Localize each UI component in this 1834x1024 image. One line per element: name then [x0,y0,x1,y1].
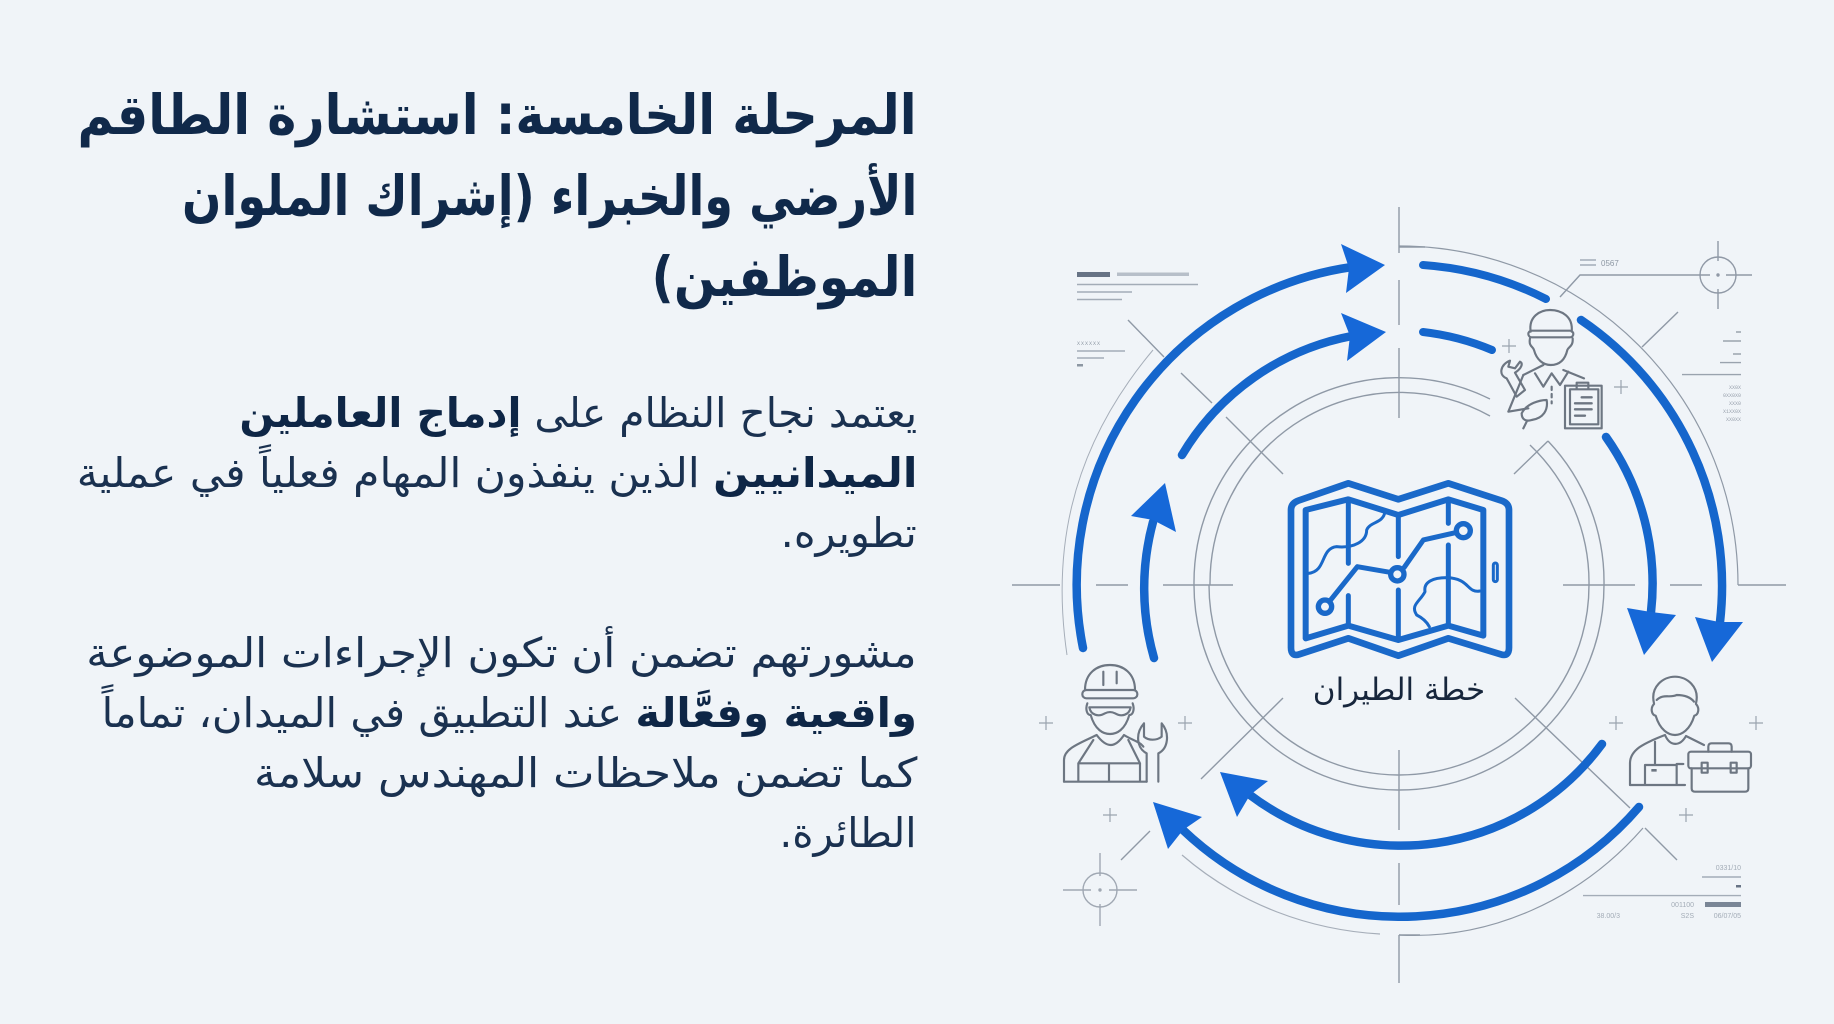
crosshair: top right [1700,241,1736,309]
blueprint notes: bottom right: 06/07/05 [1714,913,1741,920]
paragraph: field workers integration: الميدانيين الذين ينفذون المهام فعلياً في عملية [76,449,917,497]
arrow: top right outer dash [1423,265,1546,299]
label: flight plan: خطة الطيران [1313,672,1485,708]
blueprint notes: right side [1682,332,1741,423]
arrow: inner bottom [1220,744,1602,846]
arrow: short inner left upward [1131,483,1176,658]
blueprint background lines [1012,207,1786,983]
title: المرحلة الخامسة: استشارة الطاقم [78,83,917,147]
blueprint notes: bottom right: 001100 [1671,902,1694,909]
arrow: outer bottom [1153,802,1639,917]
paragraph: realistic and effective procedures: كما تضمن ملاحظات المهندس سلامة [254,749,917,797]
paragraph: realistic and effective procedures: مشورتهم تضمن أن تكون الإجراءات الموضوعة [87,629,917,677]
icon: worker with hard hat and wrench [1064,665,1167,782]
paragraph: field workers integration: تطويره. [781,509,917,557]
blueprint notes: top left [1077,272,1198,366]
blueprint notes: bottom right: 0331/10 [1716,865,1741,872]
arrow: inner left to top [1182,313,1386,455]
arrow: outer left to top [1077,244,1385,648]
blueprint notes: right side: X1XX0X [1723,409,1741,415]
icon: technician with toolbox [1630,677,1751,792]
paragraph: realistic and effective procedures: واقعية وفعَّالة عند التطبيق في الميدان، تماماً [102,689,917,737]
blueprint notes: top right: 0567 [1601,259,1619,268]
icon: engineer with wrench and clipboard [1501,310,1602,428]
blueprint notes: right side: XX0XX [1726,417,1741,423]
blueprint notes: top right [1580,259,1619,268]
blueprint notes: bottom right [1583,865,1741,920]
blueprint notes: right side: XX0X [1729,385,1741,391]
paragraph: realistic and effective procedures [87,626,918,857]
arrow: outer right downward [1581,320,1743,662]
paragraph: field workers integration: يعتمد نجاح النظام على إدماج العاملين [239,389,917,437]
paragraph: field workers integration [76,389,917,557]
blueprint notes: top left: XXXXXX [1077,341,1101,347]
arrow: inner right downward [1606,437,1676,655]
title: الموظفين) [651,245,917,309]
title: الأرضي والخبراء (إشراك الملوان [182,164,917,228]
blueprint notes: right side: 0XX0X0 [1723,393,1741,399]
title [78,83,917,310]
arrow: top right inner dash [1423,332,1492,350]
plus markers [1039,339,1763,822]
blueprint notes: right side: XXX0 [1729,401,1741,407]
blueprint notes: bottom right: 38.00/3 [1597,913,1620,920]
icon: flight plan map [1291,483,1509,656]
blueprint notes: bottom right: S2S [1681,913,1694,920]
paragraph: realistic and effective procedures: الطائرة. [780,809,917,857]
crosshair: bottom left [1063,853,1137,926]
